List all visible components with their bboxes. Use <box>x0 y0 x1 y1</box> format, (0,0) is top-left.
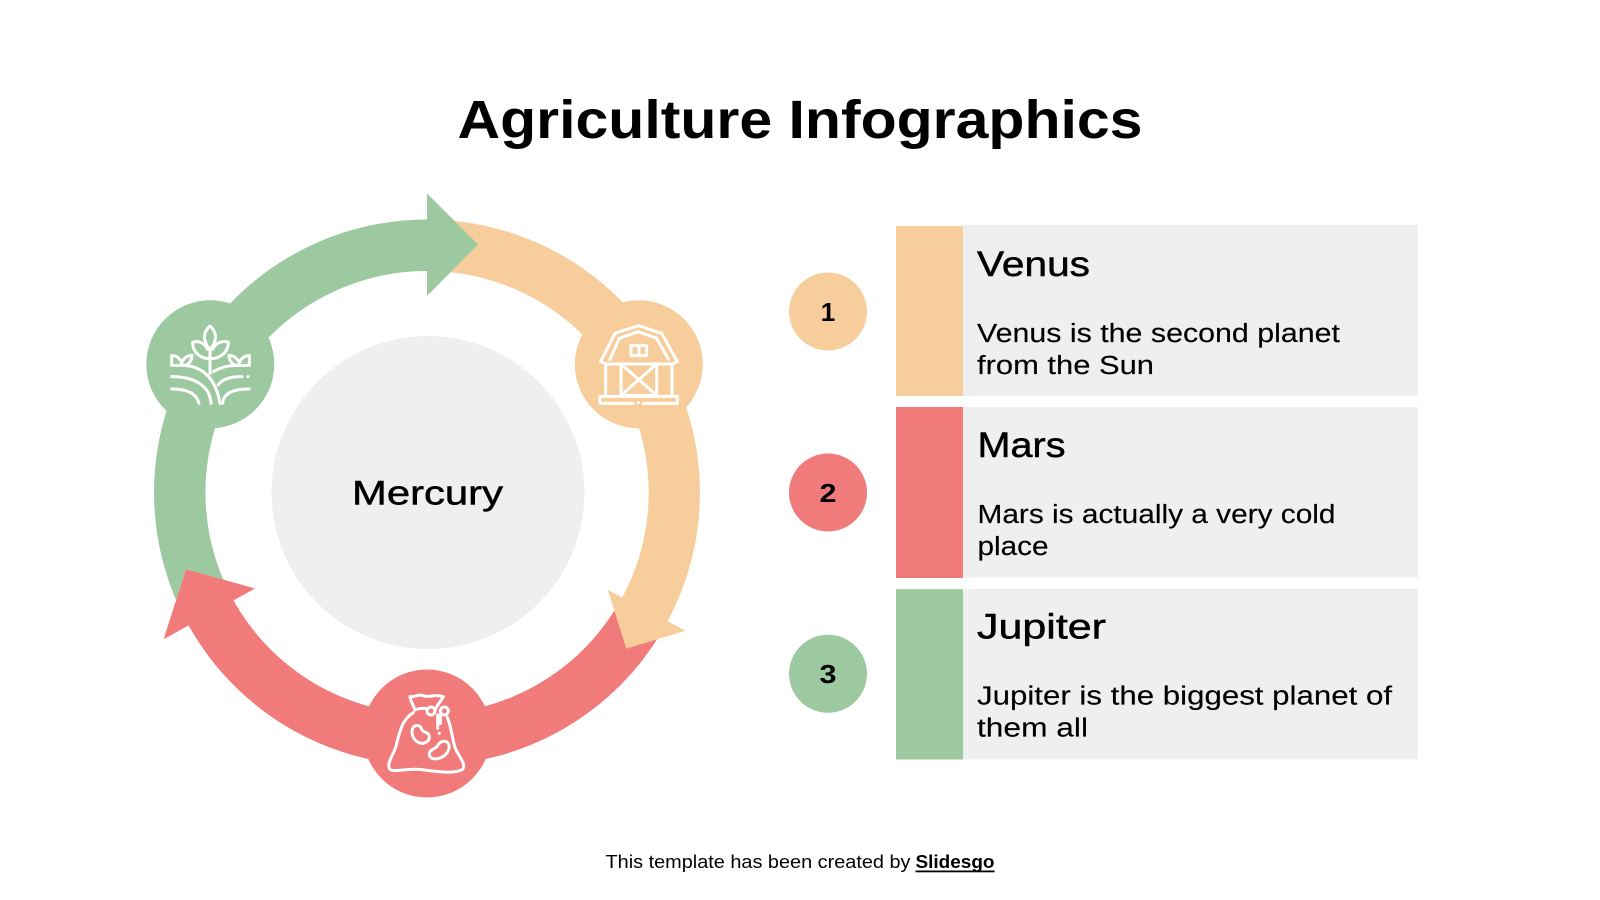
arrow: red <box>164 569 663 765</box>
arrow: green <box>154 194 478 600</box>
cycle diagram <box>146 194 703 798</box>
description: Jupiter is the biggest planet of <box>977 682 1393 710</box>
color block <box>896 407 963 578</box>
node: red seed bag <box>363 670 491 798</box>
description: Venus is the second planet <box>977 320 1340 348</box>
color block <box>896 589 963 760</box>
heading: Venus <box>977 245 1090 284</box>
color block <box>896 226 963 396</box>
description: from the Sun <box>977 352 1154 380</box>
number badge 3 <box>789 635 867 713</box>
number badge 2 <box>789 454 867 532</box>
footer credit: This template has been created by <box>606 851 911 872</box>
number badge 1: 1 <box>821 297 835 327</box>
panel: Jupiter <box>789 589 1418 760</box>
icon: sprouting field <box>172 326 249 403</box>
heading: Jupiter <box>977 607 1106 646</box>
icon: barn <box>600 326 677 403</box>
description: place <box>978 533 1048 561</box>
panel: Mars <box>789 407 1418 578</box>
node: green plant <box>146 300 274 428</box>
center circle: Mercury <box>272 336 584 649</box>
title: Agriculture Infographics <box>458 90 1142 150</box>
number badge 3: 3 <box>820 659 836 689</box>
heading: Mars <box>978 426 1066 465</box>
node: orange barn <box>575 300 703 428</box>
description: Mars is actually a very cold <box>978 501 1336 529</box>
footer credit: Slidesgo <box>916 851 994 872</box>
arrow: orange <box>439 220 700 649</box>
icon: seed sack <box>389 695 464 772</box>
panel: Venus <box>789 225 1418 396</box>
description: them all <box>977 714 1088 742</box>
number badge 2: 2 <box>820 478 836 508</box>
number badge 1 <box>789 272 867 350</box>
center circle: Mercury: Mercury <box>352 474 503 512</box>
